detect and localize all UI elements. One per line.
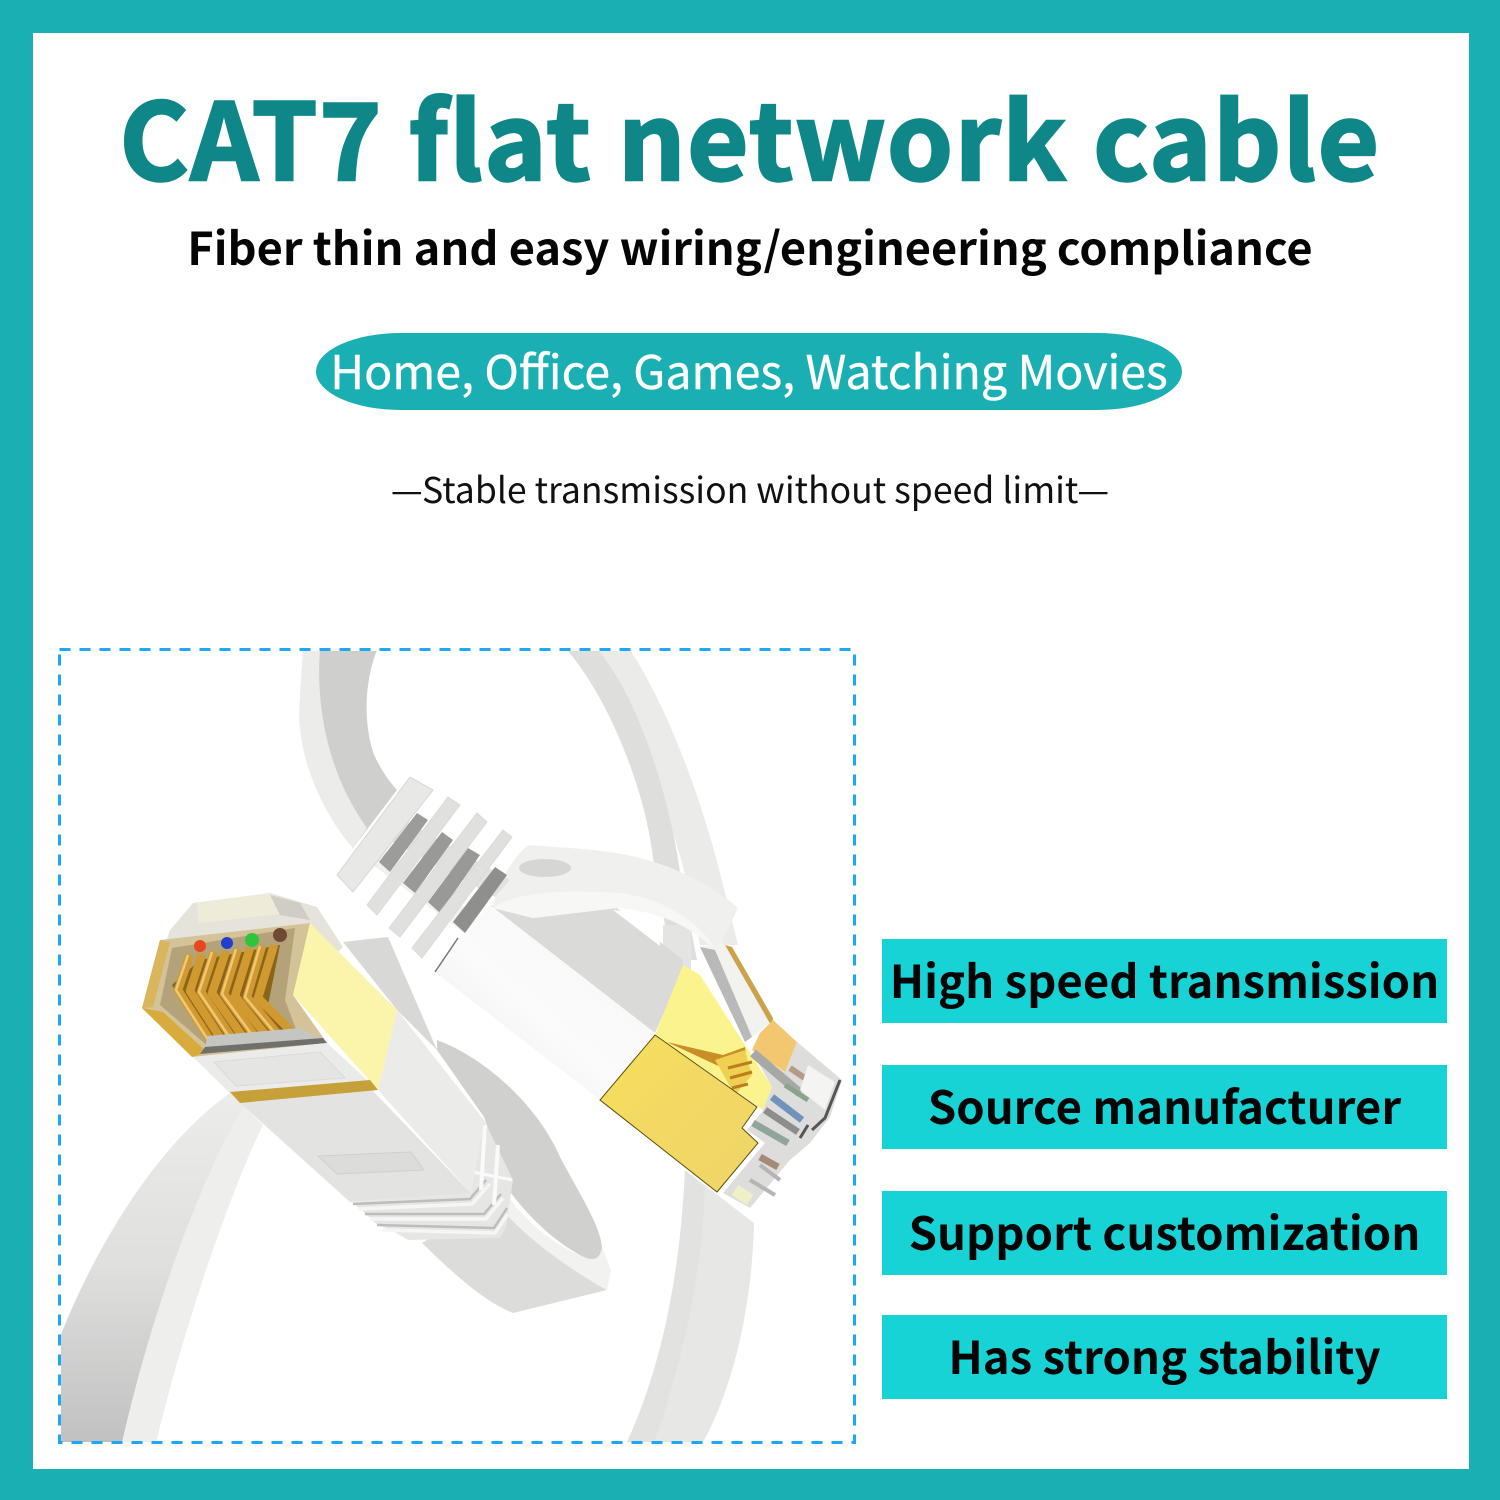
tag: stability <box>882 1315 1447 1399</box>
icon: right connector boot <box>336 776 738 1048</box>
tag: source manufacturer: Source manufacturer <box>928 1072 1401 1138</box>
tagline: —Stable transmission without speed limit— <box>391 463 1109 514</box>
title: CAT7 flat network cable <box>119 58 1381 211</box>
tag: stability: Has strong stability <box>948 1322 1381 1388</box>
dashed frame <box>60 650 854 1442</box>
tag: support customization: Support customization <box>909 1198 1420 1264</box>
tag: source manufacturer <box>882 1065 1447 1149</box>
pill: usage scenarios: Home, Office, Games, Watching Movies <box>330 336 1168 403</box>
cable illustration in dashed frame <box>58 648 856 1444</box>
cable strands <box>60 650 754 1442</box>
icon: right connector gold shield and tip <box>600 943 842 1208</box>
icon: left connector <box>142 893 513 1240</box>
tag: high speed: High speed transmission <box>890 946 1439 1012</box>
subtitle: Fiber thin and easy wiring/engineering compliance <box>187 214 1313 279</box>
